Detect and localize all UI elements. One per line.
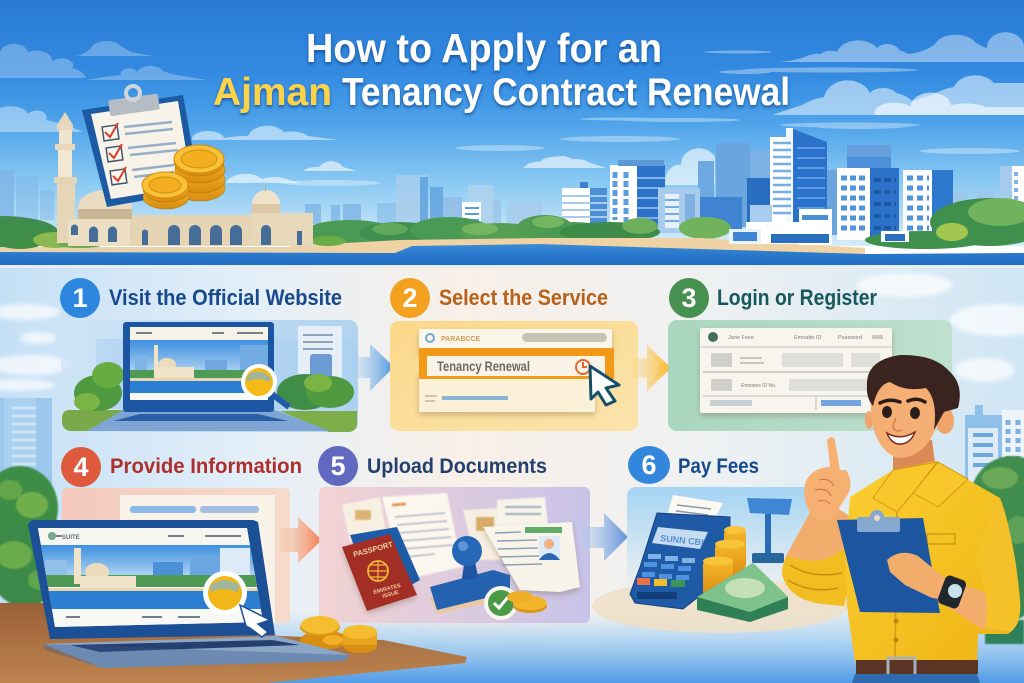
tree right xyxy=(970,456,1024,644)
background tower block xyxy=(698,143,995,235)
icon: coin pile on table xyxy=(300,616,377,653)
block C xyxy=(658,188,700,233)
step 3 heading xyxy=(669,278,877,318)
shirt sleeve left xyxy=(782,546,856,606)
icon: coins beside check xyxy=(507,591,547,613)
panel: step 2 select the service xyxy=(390,278,638,431)
background: sky xyxy=(0,0,1024,246)
icon: banknote stack xyxy=(697,563,788,622)
step 4 heading: Provide Information xyxy=(110,455,302,478)
tallest tower xyxy=(770,128,827,224)
grass and bushes xyxy=(62,362,357,432)
far right block xyxy=(1000,166,1024,226)
icon: passport: ISSUE xyxy=(382,590,400,600)
ID card document xyxy=(483,522,580,592)
icon: cursor xyxy=(590,366,619,405)
background city right xyxy=(965,405,1024,498)
background city left xyxy=(0,398,52,488)
hand holding clipboard xyxy=(887,553,948,600)
step 4 heading xyxy=(61,447,302,487)
neck xyxy=(893,440,936,495)
icon: green check badge xyxy=(484,586,518,620)
step 3 heading: Login or Register xyxy=(717,285,877,310)
panel: step 3 login or register xyxy=(668,278,952,431)
right sleeve xyxy=(975,497,1020,632)
icon: coin stacks xyxy=(703,526,746,597)
clouds in the sky xyxy=(0,32,1024,186)
background: lower section xyxy=(0,265,1024,683)
block B xyxy=(610,160,665,228)
laptop screen content xyxy=(30,528,270,627)
icon: magnifying glass xyxy=(241,364,289,407)
arrow 1 to 2 xyxy=(352,344,394,391)
icon: clock xyxy=(576,360,590,374)
icon: passport: EMIRATES xyxy=(373,583,402,596)
minaret xyxy=(54,112,77,243)
water strip xyxy=(0,244,1024,265)
step 5 heading: Upload Documents xyxy=(367,455,547,478)
icon: payment terminal: SUNN CBI xyxy=(660,533,704,548)
mosque illustration xyxy=(0,112,346,249)
document thumbnail xyxy=(298,326,342,378)
step 5 heading: 5 xyxy=(330,451,346,481)
panel: step 1 visit the official website xyxy=(60,278,358,432)
tenancy renewal field text: Tenancy Renewal xyxy=(437,358,530,374)
login form card xyxy=(700,328,892,413)
panel: step 2 select the service: PARABCCE xyxy=(441,336,480,343)
domes xyxy=(78,186,280,226)
back documents xyxy=(342,493,548,580)
right forearm xyxy=(945,578,1018,632)
trees beside the mosque xyxy=(0,223,346,249)
title: Ajman xyxy=(213,71,332,114)
step 6 heading: Pay Fees xyxy=(678,455,759,478)
white low block xyxy=(562,182,607,223)
laptop cursor xyxy=(240,605,270,637)
block G xyxy=(903,170,953,238)
icon: passport xyxy=(342,527,420,611)
sandy shore and tree line xyxy=(0,198,1024,255)
tree left xyxy=(0,466,61,607)
icon: passport: PASSPORT xyxy=(352,540,394,559)
magnifier on laptop screen xyxy=(203,571,247,615)
skyline: right buildings xyxy=(562,128,1024,240)
login form card: Password xyxy=(838,335,862,341)
laptop on the desk: SUITE xyxy=(62,535,80,541)
icon: coin stacks xyxy=(142,145,225,209)
wooden table xyxy=(0,603,467,683)
arrow 5 to 6 xyxy=(578,513,628,561)
front low block xyxy=(729,205,909,245)
step 2 heading: 2 xyxy=(402,283,418,313)
step 2 heading: Select the Service xyxy=(439,285,608,310)
block F xyxy=(837,157,899,240)
head xyxy=(865,355,960,458)
icon: stamp xyxy=(430,536,510,614)
character: man with clipboard xyxy=(782,355,1020,683)
title xyxy=(213,25,790,114)
background clouds left and right xyxy=(0,273,1024,391)
login form card: Emirates ID No. xyxy=(741,383,776,389)
step 4 heading: 4 xyxy=(73,452,89,482)
bottom water fade xyxy=(0,612,1024,683)
title: Tenancy Contract Renewal xyxy=(342,71,790,114)
icon: payment terminal xyxy=(630,513,730,609)
login form card: Jane Fees xyxy=(728,335,754,341)
step 6 heading: 6 xyxy=(641,450,657,480)
arrow 4 to 5 xyxy=(280,517,322,563)
shirt torso xyxy=(845,461,1020,662)
step 1 heading: Visit the Official Website xyxy=(109,285,342,310)
raised arm xyxy=(784,504,854,582)
clipboard held by man xyxy=(837,510,940,613)
laptop on step 1 xyxy=(87,322,330,431)
panel: step 6 pay fees xyxy=(592,446,848,633)
icon: wristwatch xyxy=(937,574,967,610)
service card xyxy=(419,329,612,412)
title: How to Apply for an xyxy=(306,25,662,71)
icon: clipboard with checklist xyxy=(82,86,200,207)
panel: step 5 upload documents xyxy=(318,446,590,623)
step 6 heading xyxy=(628,446,759,484)
step 5 heading xyxy=(318,446,547,486)
step 1 heading xyxy=(60,278,342,318)
login form card: Emiratte ID xyxy=(794,335,822,341)
step 1 heading: 1 xyxy=(72,283,88,313)
raised hand pointing finger xyxy=(804,437,851,520)
white building in the middle distance xyxy=(462,202,481,228)
mosque hall xyxy=(68,209,313,246)
distant buildings left xyxy=(0,170,542,230)
laptop on the desk xyxy=(28,520,350,668)
icon: card reader stand xyxy=(747,498,792,563)
icon: receipt xyxy=(667,495,723,522)
belt and trousers xyxy=(852,658,980,683)
panel: step 4 provide information xyxy=(61,447,302,623)
arrow 2 to 3 xyxy=(632,345,671,391)
step 2 heading xyxy=(390,278,608,318)
step 3 heading: 3 xyxy=(681,283,697,313)
